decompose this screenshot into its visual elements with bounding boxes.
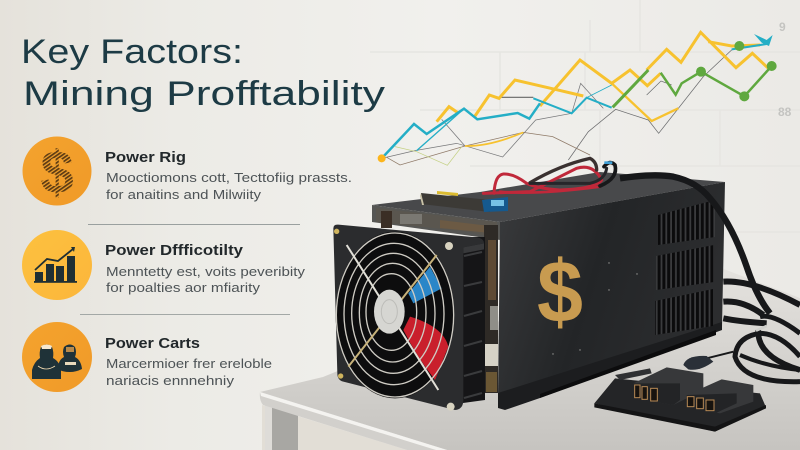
power cables [620, 175, 800, 382]
gold dollar sign: $ [537, 242, 583, 341]
text: power carts: nariacis ennnehniy [106, 373, 235, 388]
text: power rig: Mooctiomons cott, Tecttofiig prassts. [106, 170, 352, 185]
factor: power carts [22, 322, 272, 392]
thin grey and brown lines [382, 48, 733, 165]
fan [333, 225, 484, 411]
ribbon connector on top [420, 191, 508, 212]
connector tray [594, 367, 766, 432]
text: power rig [105, 150, 352, 202]
text: power difficulty [105, 243, 306, 295]
icon: two workers [22, 322, 92, 392]
psu side panel [498, 182, 725, 410]
left connector [633, 367, 703, 405]
text: power carts [105, 336, 272, 388]
text: power difficulty: Menntetty est, voits peveribity [106, 264, 306, 279]
line chart [378, 32, 777, 165]
teal line [383, 34, 773, 157]
exposed circuit board [372, 205, 500, 393]
right connector [687, 379, 753, 413]
title: Key Factors: [21, 33, 243, 71]
text: power difficulty: Power Dffficotilty [105, 243, 243, 259]
icon: dollar coin [22, 136, 92, 206]
fan hub [374, 290, 405, 334]
faint axis numbers [778, 20, 792, 119]
icon: rising bar chart [22, 230, 92, 300]
icon: dollar coin: $ [40, 139, 74, 206]
corner screws [334, 229, 339, 234]
green line [613, 66, 772, 107]
front side vents [463, 237, 485, 403]
fan blades [408, 267, 442, 303]
text: power difficulty: for poalties aor mfiarity [106, 280, 261, 295]
faint axis numbers: 9 [779, 20, 786, 34]
factor: power difficulty [22, 230, 306, 300]
text: power rig: for anaitins and Milwiity [106, 187, 262, 202]
red and black wires [483, 158, 616, 193]
table [260, 260, 800, 450]
faint axis numbers: 88 [778, 105, 792, 119]
yellow line [437, 32, 768, 146]
top panel [372, 172, 725, 222]
text: power rig: Power Rig [105, 150, 186, 166]
title: Mining Profftability [23, 75, 385, 113]
factor: power rig [22, 136, 352, 206]
miner unit [333, 172, 725, 411]
data points [378, 41, 777, 162]
text: power carts: Power Carts [105, 336, 200, 352]
title [21, 33, 385, 113]
grill rings [336, 233, 454, 397]
text: power carts: Marcermioer frer ereloble [106, 356, 272, 371]
